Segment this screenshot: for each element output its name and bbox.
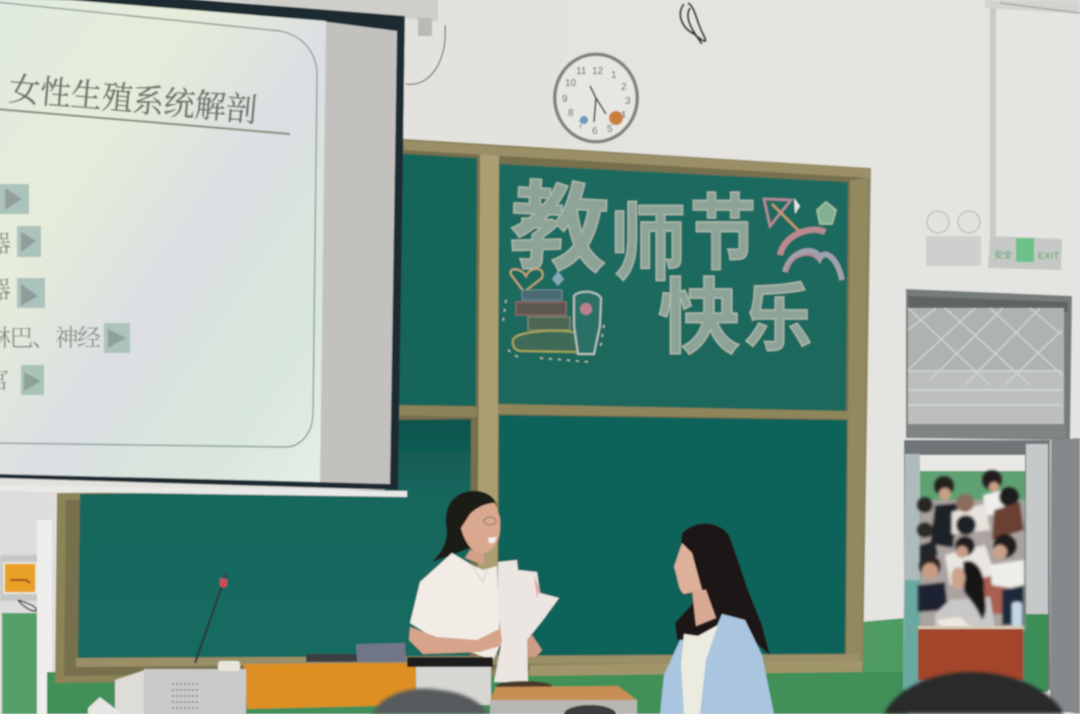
face — [461, 503, 500, 553]
left wall section — [0, 490, 54, 714]
slide title: 女性生殖系统解剖 — [7, 71, 259, 130]
exit sign: EXIT — [1038, 251, 1059, 262]
chalk text: 快乐 — [658, 273, 812, 364]
wall clock: 3 — [625, 96, 631, 107]
microphone — [195, 573, 227, 663]
face — [674, 543, 702, 594]
window with security grille — [906, 289, 1072, 440]
doorway — [903, 438, 1080, 714]
lectern: orange desk panel — [244, 663, 416, 709]
center frame post — [477, 153, 499, 664]
chalk text: 教师节: 师 — [610, 197, 686, 291]
screen bottom bar — [0, 485, 407, 497]
wall clock: 5 — [607, 124, 613, 135]
door frame — [904, 440, 1050, 690]
upper left board — [392, 153, 477, 406]
lit slide — [0, 0, 326, 482]
ceiling strip and pipe — [985, 0, 1080, 236]
door panel — [1050, 438, 1080, 714]
unlit screen area — [316, 21, 397, 484]
exit sign: 安全 — [994, 249, 1012, 260]
slide rounded border — [0, 2, 317, 447]
green dado bottom — [47, 672, 907, 714]
bouquet — [494, 560, 559, 682]
wall clock: 6 — [592, 126, 598, 137]
audience head bottom right — [884, 672, 1064, 714]
neck — [692, 590, 716, 626]
chalk drawing: books, heart and bouquet — [503, 269, 604, 362]
lower left board — [78, 419, 471, 658]
wall clock: 1 — [611, 70, 617, 81]
hand — [508, 635, 542, 657]
audience head small — [564, 705, 616, 714]
wall clock: 10 — [565, 78, 577, 89]
wall clock: 9 — [562, 94, 568, 105]
white blouse — [681, 625, 718, 714]
arm — [409, 627, 507, 654]
chalk text: 教师节: 教 — [507, 173, 611, 285]
hair — [432, 491, 497, 562]
wall clock — [553, 52, 639, 144]
back hair — [675, 523, 770, 655]
wall wires — [680, 3, 706, 44]
green dado right of board — [860, 618, 906, 714]
slide title rule — [0, 109, 290, 134]
exit sign — [988, 236, 1062, 270]
lower right board — [498, 415, 847, 656]
tray and side table — [416, 667, 637, 714]
door jamb right — [1026, 444, 1048, 614]
chalk text: 快乐: 乐 — [744, 277, 812, 360]
wall clock: 11 — [576, 66, 587, 77]
chalk greeting — [507, 173, 812, 364]
screen frame — [0, 0, 405, 490]
chalk text: 快乐: 快 — [658, 273, 740, 364]
chalk text: 教师节: 节 — [690, 189, 756, 280]
podium control unit — [88, 661, 246, 714]
student in blue cardigan — [660, 523, 774, 714]
chalk drawing: kite and rainbows — [764, 198, 842, 280]
chalk text: 教师节 — [507, 173, 756, 291]
icon: orange notice box — [4, 563, 36, 593]
upper right board — [497, 164, 848, 412]
wall clock: 2 — [621, 82, 627, 93]
wall clock: 8 — [568, 108, 574, 119]
wall clock: 7 — [578, 120, 584, 131]
room view background — [920, 455, 1025, 471]
teacher — [407, 491, 559, 682]
white blouse — [410, 553, 500, 660]
audience head bottom centre — [372, 688, 488, 714]
slide menu row 1 — [0, 184, 29, 214]
wall clock: 12 — [592, 66, 604, 77]
desk in next room — [918, 628, 1023, 680]
emergency light — [926, 211, 981, 266]
students in next room — [917, 470, 1025, 630]
slide menu row 3 — [0, 278, 45, 308]
slide menu row 5 — [0, 365, 44, 395]
slide menu row 4 — [0, 323, 130, 353]
chalkboard frame — [55, 138, 871, 683]
black skirt — [407, 657, 493, 667]
slide menu row 2 — [0, 226, 41, 258]
black tray on desk — [306, 643, 406, 662]
projector screen mount — [200, 0, 445, 84]
projector screen — [0, 0, 407, 497]
cardigan — [660, 614, 774, 714]
wall clock: 4 — [620, 110, 626, 121]
